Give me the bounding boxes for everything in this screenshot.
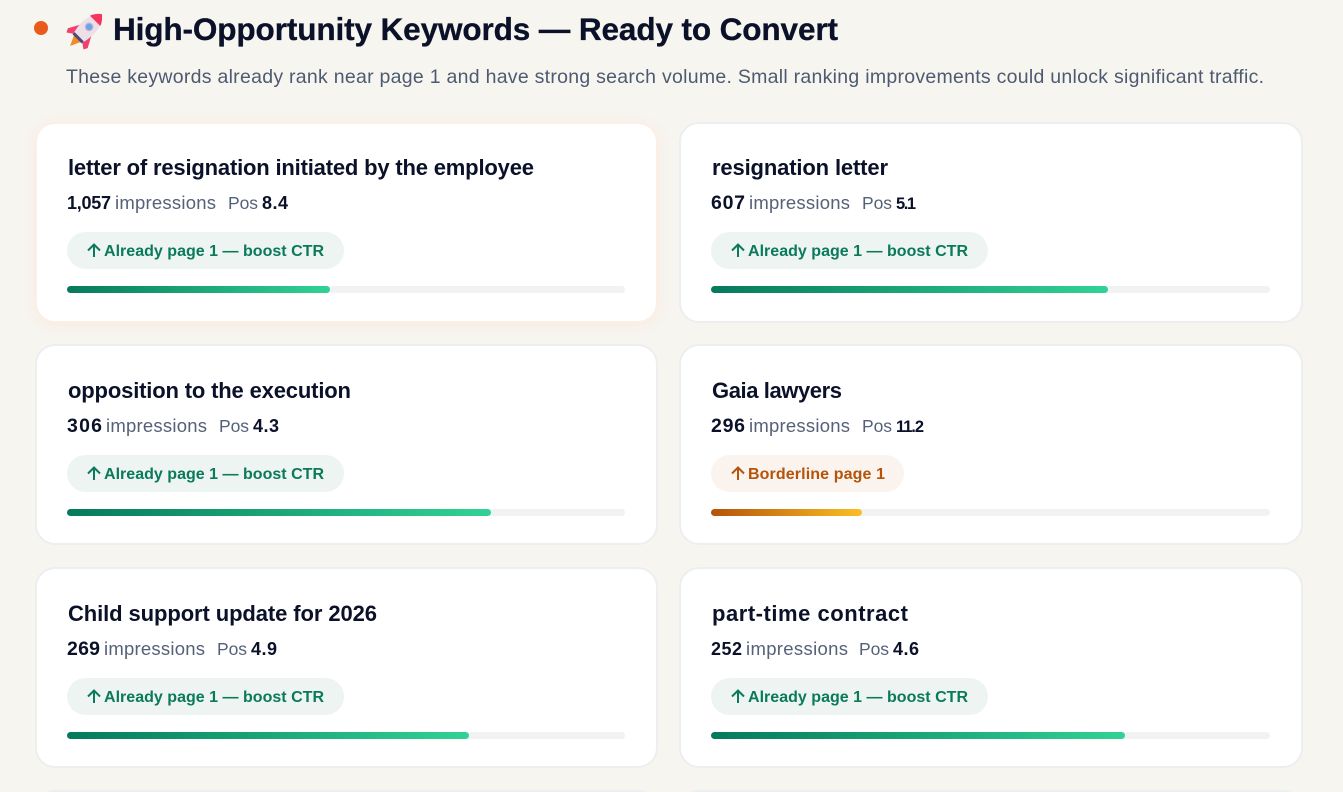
card: letter of resignation initiated by the employee xyxy=(36,123,657,322)
stats: 11.2 xyxy=(896,418,924,436)
stats xyxy=(67,638,277,660)
card: Gaia lawyers: Gaia lawyers xyxy=(712,378,842,403)
stats: 8.4 xyxy=(262,193,288,213)
progress bar xyxy=(67,732,625,739)
badge xyxy=(711,232,988,269)
stats xyxy=(711,192,916,214)
icon: rocket xyxy=(60,4,112,56)
stats xyxy=(67,415,279,437)
stats: 1,057 xyxy=(67,193,111,213)
stats: 4.3 xyxy=(253,416,279,436)
stats: Pos xyxy=(862,193,892,213)
stats: 252 xyxy=(711,639,742,659)
badge xyxy=(67,232,344,269)
section header xyxy=(34,4,1264,88)
stats: 4.6 xyxy=(893,639,919,659)
badge: Already page 1 — boost CTR xyxy=(104,466,324,483)
card: part-time contract xyxy=(680,568,1302,767)
card: Child support update for 2026: Child support update for 2026 xyxy=(68,601,377,626)
stats xyxy=(711,415,924,437)
stats: 306 xyxy=(67,415,102,437)
stats: impressions xyxy=(115,192,216,213)
badge: Already page 1 — boost CTR xyxy=(748,243,968,260)
card: part-time contract: part-time contract xyxy=(712,601,909,626)
card: Child support update for 2026 xyxy=(36,568,657,767)
progress bar xyxy=(711,286,1270,293)
card: letter of resignation initiated by the employee: letter of resignation initiated by the employee xyxy=(68,155,534,180)
stats: Pos xyxy=(217,639,247,659)
progress bar xyxy=(67,509,625,516)
card: next row left (cropped) xyxy=(36,791,657,792)
stats xyxy=(67,192,288,213)
card: opposition to the execution: opposition to the execution xyxy=(68,378,351,403)
stats: 269 xyxy=(67,638,100,660)
badge: Borderline page 1 xyxy=(748,466,885,483)
badge xyxy=(67,455,344,492)
stats: impressions xyxy=(749,192,850,213)
card: resignation letter: resignation letter xyxy=(712,155,888,180)
progress bar xyxy=(711,509,1270,516)
subtitle: These keywords already rank near page 1 and have strong search volume. Small ranking improvements could unlock significant traffic. xyxy=(66,66,1264,88)
stats: Pos xyxy=(859,639,889,659)
progress bar xyxy=(711,732,1270,739)
card: resignation letter xyxy=(680,123,1302,322)
icon: orange status dot xyxy=(34,21,48,35)
card: Gaia lawyers xyxy=(680,345,1302,544)
stats: impressions xyxy=(746,638,848,659)
stats: impressions xyxy=(104,638,205,659)
stats: 607 xyxy=(711,192,745,214)
card: opposition to the execution xyxy=(36,345,657,544)
badge xyxy=(67,678,344,715)
progress bar xyxy=(67,286,625,293)
badge: Already page 1 — boost CTR xyxy=(104,243,324,260)
stats: impressions xyxy=(106,415,207,436)
stats: Pos xyxy=(862,416,892,436)
badge xyxy=(711,678,988,715)
stats: 296 xyxy=(711,415,745,437)
badge xyxy=(711,455,904,492)
stats: 4.9 xyxy=(251,639,277,659)
card: next row right (cropped) xyxy=(680,791,1302,792)
title: High-Opportunity Keywords — Ready to Convert xyxy=(113,11,838,47)
badge: Already page 1 — boost CTR xyxy=(748,689,968,706)
stats xyxy=(711,638,919,659)
stats: Pos xyxy=(219,416,249,436)
stats: Pos xyxy=(228,193,258,213)
stats: impressions xyxy=(749,415,850,436)
stats: 5.1 xyxy=(896,195,916,213)
badge: Already page 1 — boost CTR xyxy=(104,689,324,706)
